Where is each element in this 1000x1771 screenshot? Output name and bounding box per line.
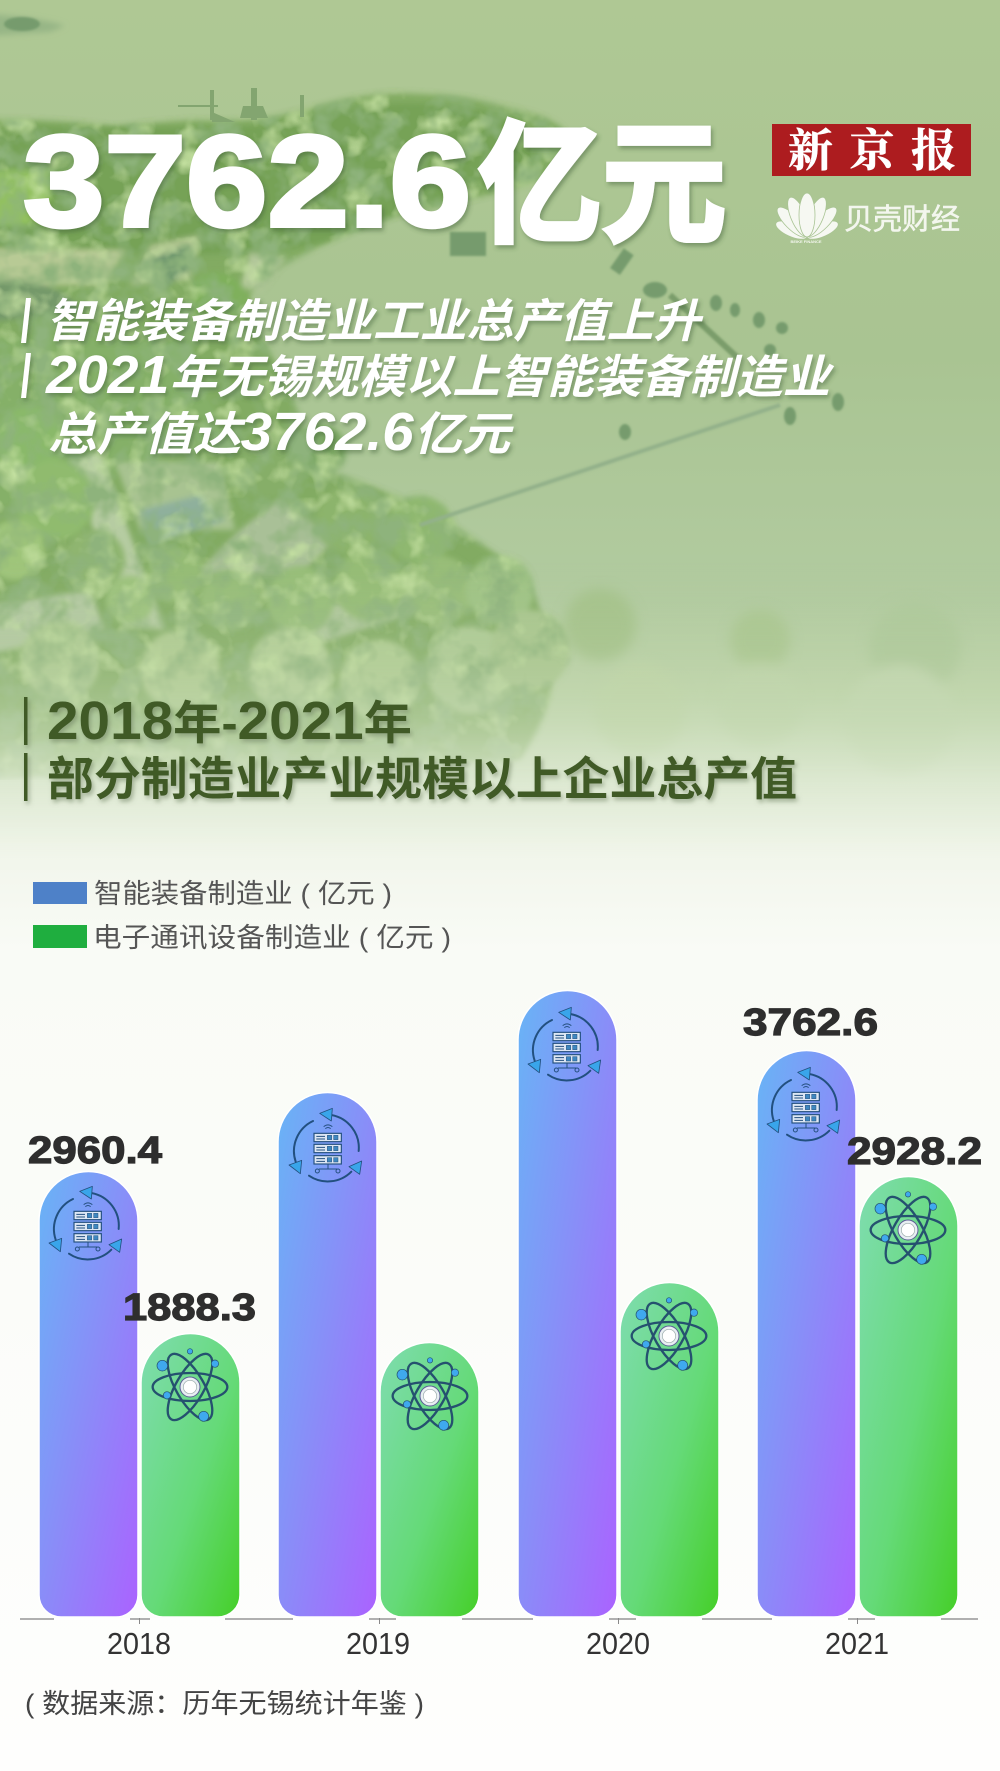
icon: server 2019 [289,1108,362,1181]
value: 2021 smart equipment: 3762.6 [743,1002,878,1044]
bar: 2018 smart equipment [39,1172,138,1617]
value: 2018 smart equipment: 2960.4 [28,1130,162,1172]
value: 2021 electronics: 2928.2 [847,1131,982,1173]
icon: shell [773,193,841,243]
bar: 2021 smart equipment [757,1051,856,1617]
value labels [28,1002,982,1329]
subtitle text block [21,295,835,462]
subtitle line 1: 智能装备制造业工业总产值上升 [46,295,704,347]
icon: atom 2020 [632,1297,706,1375]
year 2021: 2021 [825,1626,889,1661]
pagodas on hilltop [178,88,304,122]
bar chart [39,990,958,1617]
section heading [24,691,797,805]
logo: 贝壳财经: BEIKE FINANCE [790,239,822,244]
icon: server 2021 [767,1067,840,1140]
legend [33,879,451,953]
year 2020: 2020 [586,1626,650,1661]
bar: 2019 smart equipment [278,1092,377,1617]
heading line 1: 2018年-2021年 [47,691,412,751]
icon: atom 2019 [393,1357,467,1435]
icon: atom 2021 [871,1191,945,1269]
distant islet [0,14,65,36]
heading line 2: 部分制造业产业规模以上企业总产值 [47,753,797,805]
icon: server 2018 [49,1186,122,1259]
logo: 新京报: 新京报 [788,126,956,176]
title: 3762.6亿元: 3762.6 [23,108,471,254]
legend: electronics: 电子通讯设备制造业 ( 亿元 ) [93,923,451,953]
source note: ( 数据来源：历年无锡统计年鉴 ) [25,1689,424,1719]
bar: 2019 electronics [380,1343,479,1617]
peninsula land mass [0,0,1000,780]
legend: smart equipment: 智能装备制造业 ( 亿元 ) [94,879,392,909]
bar: 2020 electronics [620,1282,719,1617]
bar: 2021 electronics [859,1176,958,1617]
axis line [20,1618,978,1624]
icon: server 2020 [528,1007,601,1080]
fog over lower land [0,560,1000,870]
subtitle line 2: 2021年无锡规模以上智能装备制造业 [45,345,835,405]
bar: 2018 electronics [141,1334,240,1617]
misty trees on right [564,589,961,775]
value: 2018 electronics: 1888.3 [123,1287,256,1329]
logo: 贝壳财经: 贝壳财经 [844,203,960,236]
year 2019: 2019 [346,1626,410,1661]
tree crowns [0,406,570,720]
icon: atom 2018 [153,1348,227,1426]
subtitle line 3: 总产值达3762.6亿元 [48,402,514,462]
title: 3762.6亿元: 亿元 [478,112,726,259]
logo: 贝壳财经 [773,193,960,244]
causeway piers [255,292,780,525]
bar: 2020 smart equipment [518,990,617,1617]
year 2018: 2018 [107,1626,171,1661]
axis year labels [107,1626,889,1661]
title: 3762.6亿元 [23,108,726,259]
